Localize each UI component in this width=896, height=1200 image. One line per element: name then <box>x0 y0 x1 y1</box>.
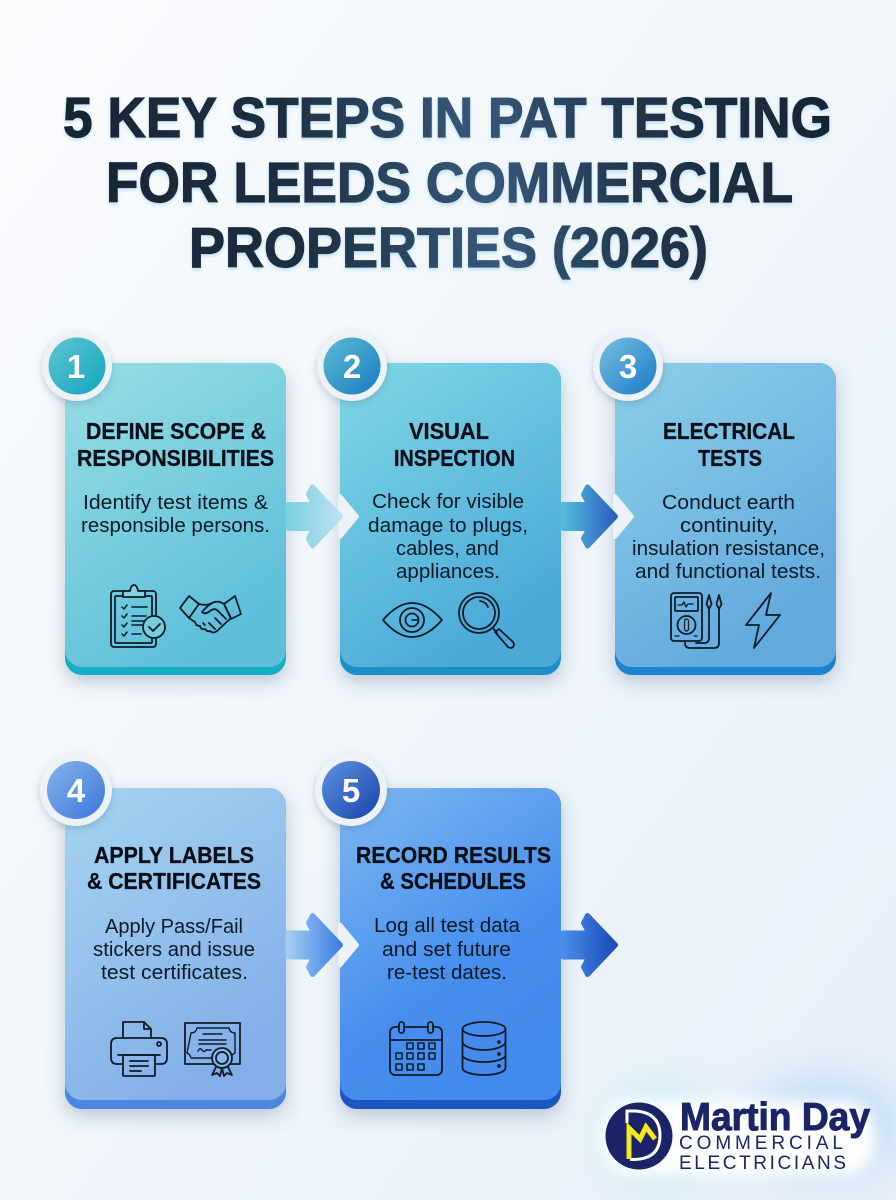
card 3 heading: TESTS <box>698 445 762 471</box>
arrow: step 2 to step 3 <box>563 487 632 546</box>
card 3 description: continuity, <box>680 515 778 537</box>
icon: clipboard checklist <box>111 585 165 647</box>
card 1 heading: RESPONSIBILITIES <box>77 445 274 471</box>
icon: magnifying glass <box>459 593 514 648</box>
card 4 heading: APPLY LABELS <box>94 842 254 868</box>
title: 5 KEY STEPS IN PAT TESTING <box>63 86 832 150</box>
card 3 description: insulation resistance, <box>632 538 825 560</box>
card 3 description: Conduct earth <box>662 492 795 514</box>
icon: calendar <box>390 1022 442 1075</box>
logo mark <box>606 1102 672 1170</box>
badge: number 3 <box>593 331 663 401</box>
logo tagline: ELECTRICIANS <box>679 1153 846 1174</box>
panel: step 1 define scope <box>65 363 286 675</box>
arrow: step 4 to step 5 <box>288 916 357 974</box>
card 5 description: Log all test data <box>374 915 521 937</box>
icon: printer <box>111 1022 167 1076</box>
logo name: Martin Day <box>680 1096 870 1139</box>
icon: eye <box>383 603 442 637</box>
icon: certificate <box>185 1023 240 1076</box>
card 1 description: responsible persons. <box>81 515 270 537</box>
card 5 heading: & SCHEDULES <box>380 868 526 894</box>
panel: step 2 visual inspection <box>340 363 561 675</box>
badge: number 3: 3 <box>619 348 637 385</box>
card 3 description: and functional tests. <box>635 561 821 583</box>
card 3 heading: ELECTRICAL <box>663 418 795 444</box>
panel: step 5 record results <box>340 788 561 1109</box>
card 4 heading: & CERTIFICATES <box>87 868 261 894</box>
card 4 heading <box>87 842 261 894</box>
badge: number 2 <box>317 331 387 401</box>
card 1 heading: DEFINE SCOPE & <box>86 418 266 444</box>
icon: database <box>462 1022 506 1075</box>
card 2 heading: INSPECTION <box>394 445 515 471</box>
card 5 heading: RECORD RESULTS <box>356 842 551 868</box>
logo glow <box>603 1080 896 1183</box>
card 1 description: Identify test items & <box>83 492 269 514</box>
title: FOR LEEDS COMMERCIAL <box>106 151 793 215</box>
card 4 description: test certificates. <box>101 962 248 984</box>
logo tagline: COMMERCIAL <box>679 1133 843 1154</box>
title <box>63 86 832 280</box>
card 2 description: damage to plugs, <box>368 515 528 537</box>
card 5 description: and set future <box>382 939 511 961</box>
badge: number 5: 5 <box>342 772 360 809</box>
arrow: step 5 onward <box>563 916 616 974</box>
badge: number 5 <box>315 754 387 826</box>
logo: Martin Day Commercial Electricians <box>606 1096 870 1174</box>
card 2 description: Check for visible <box>372 491 524 513</box>
card 5 background <box>340 788 561 1109</box>
card 2 background <box>340 363 561 675</box>
card 1 description <box>81 492 270 537</box>
card 5 description <box>374 915 521 984</box>
card 4 description: Apply Pass/Fail <box>105 916 243 938</box>
arrow: step 1 to step 2 <box>288 487 357 546</box>
card 1 heading <box>77 418 274 471</box>
card 2 description <box>368 491 528 583</box>
badge: number 4 <box>40 754 112 826</box>
card 4 description <box>93 916 255 984</box>
panel: step 3 electrical tests <box>615 363 836 675</box>
icon: lightning bolt <box>746 593 780 648</box>
card 1 background <box>65 363 286 675</box>
card 3 description <box>632 492 825 583</box>
card 5 heading <box>356 842 551 894</box>
badge: number 4: 4 <box>67 772 86 809</box>
card 2 heading <box>394 418 515 471</box>
badge: number 1: 1 <box>67 348 85 385</box>
card 2 heading: VISUAL <box>409 418 489 444</box>
card 2 description: cables, and <box>396 538 499 560</box>
panel: step 4 labels and certificates <box>65 788 286 1109</box>
logo tagline <box>679 1133 846 1174</box>
title: PROPERTIES (2026) <box>189 216 708 280</box>
badge: number 2: 2 <box>343 348 361 385</box>
card 3 background <box>615 363 836 675</box>
card 4 background <box>65 788 286 1109</box>
badge: number 1 <box>42 331 112 401</box>
card 3 heading <box>663 418 795 471</box>
icon: multimeter <box>671 593 722 648</box>
card 4 description: stickers and issue <box>93 939 255 961</box>
icon: handshake <box>180 596 241 632</box>
card 2 description: appliances. <box>396 561 500 583</box>
card 5 description: re-test dates. <box>387 962 507 984</box>
